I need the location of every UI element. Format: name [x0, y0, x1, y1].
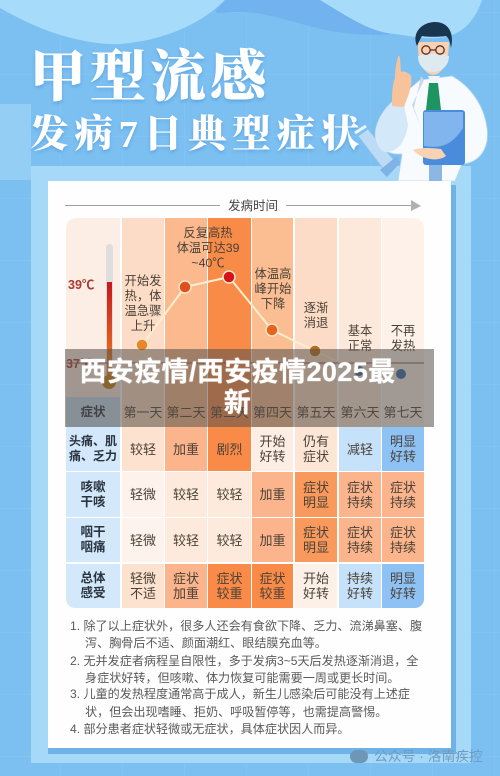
- table row: cough: 加重: [259, 487, 286, 502]
- icon: syringe: [355, 126, 400, 177]
- table row: overall feeling: 症状: [216, 571, 242, 586]
- table row: overall feeling: 开始: [303, 571, 329, 586]
- chart labels: day 4: [254, 267, 291, 311]
- table header row: 第三天: [210, 404, 249, 420]
- table row: sore throat: [66, 518, 424, 562]
- chart labels: day 6: [348, 324, 372, 353]
- chart labels: day 1: 温急骤: [125, 304, 161, 318]
- chart: temperature line with day points: [66, 270, 424, 379]
- chart labels: day 2-3: [177, 226, 239, 270]
- table row: cough: 持续: [347, 494, 373, 510]
- overlay banner: headline: 新: [224, 388, 251, 418]
- chart labels: day 1: 上升: [131, 319, 155, 333]
- table row: overall feeling: 较重: [216, 586, 242, 601]
- table row: headache and fatigue: 较轻: [130, 442, 156, 456]
- text block: notes: [70, 619, 422, 736]
- table row: overall feeling: 轻微: [130, 571, 156, 586]
- chart labels: day 6: 正常: [348, 339, 372, 353]
- chart labels: day 2-3: ~40℃: [191, 256, 225, 270]
- table row: cough: 持续: [390, 494, 416, 510]
- table row: headache and fatigue: 仍有: [303, 434, 329, 449]
- table row: overall feeling: 持续: [347, 571, 373, 586]
- table row: sore throat: 症状: [390, 525, 416, 540]
- table row: headache and fatigue: 好转: [390, 449, 416, 464]
- table row: headache and fatigue: 明显: [390, 434, 416, 449]
- table header row: 症状: [80, 404, 106, 418]
- text block: notes: 3. 儿童的发热程度通常高于成人，新生儿感染后可能没有上述症: [70, 687, 410, 701]
- table row: cough: 轻微: [130, 487, 156, 502]
- chart labels: day 7: 发热: [391, 339, 415, 353]
- table row: headache and fatigue: 症状: [303, 449, 329, 464]
- table row: headache and fatigue: 减轻: [347, 442, 373, 456]
- table row: cough: [66, 472, 424, 517]
- chart labels: day 1: [125, 274, 161, 333]
- chart labels: day 5: 逐渐: [304, 301, 328, 315]
- table row: sore throat: 持续: [347, 540, 373, 555]
- table row: overall feeling: 好转: [390, 586, 416, 601]
- text block: notes: 身症状好转，但咳嗽、体力恢复可能需要一周或更长时间。: [85, 671, 399, 685]
- table row: headache and fatigue: 剧烈: [216, 442, 242, 456]
- chart labels: day 5: 消退: [304, 316, 328, 330]
- panel: main white card: [48, 181, 451, 748]
- text block: notes: 泻、胸骨后不适、颜面潮红、眼结膜充血等。: [85, 636, 327, 650]
- table row: sore throat: 轻微: [130, 532, 156, 548]
- doctor coat: [375, 56, 487, 181]
- table row: cough: 症状: [390, 480, 416, 494]
- chart labels: day 7: 不再: [391, 324, 415, 338]
- table header row: 第二天: [166, 404, 206, 420]
- text block: notes: 2. 无并发症者病程呈自限性，多于发病3~5天后发热逐渐消退，全: [70, 654, 418, 668]
- table row: overall feeling: 总体: [80, 571, 106, 585]
- table row: headache and fatigue: 好转: [259, 449, 286, 464]
- table row: overall feeling: 较重: [259, 586, 286, 601]
- table row: headache and fatigue: 开始: [259, 434, 286, 449]
- table row: overall feeling: 症状: [259, 571, 286, 586]
- table row: headache and fatigue: 头痛、肌: [69, 434, 117, 448]
- table row: headache and fatigue: 加重: [173, 442, 199, 456]
- table row: overall feeling: 不适: [130, 586, 156, 601]
- chart: thermometer: [66, 244, 116, 389]
- table row: headache and fatigue: [66, 427, 424, 471]
- table header row: 第五天: [296, 404, 336, 420]
- chart labels: day 1: 开始发: [125, 274, 161, 288]
- table row: sore throat: 明显: [303, 540, 329, 555]
- table row: sore throat: 症状: [347, 525, 373, 540]
- table row: sore throat: 持续: [390, 540, 416, 555]
- text block: notes: 1. 除了以上症状外，很多人还会有食欲下降、乏力、流涕鼻塞、腹: [70, 619, 422, 633]
- table row: overall feeling: 症状: [173, 571, 199, 586]
- table row: sore throat: 咽痛: [80, 540, 106, 554]
- chart labels: day 2-3: 体温可达39: [177, 241, 239, 255]
- table header row: 第七天: [383, 404, 422, 420]
- overlay banner: headline: 西安疫情/西安疫情2025最: [79, 357, 396, 387]
- table header row: 第一天: [123, 404, 162, 420]
- clipboard: [413, 110, 465, 165]
- table row: cough: 较轻: [216, 487, 242, 502]
- title: influenza A: 甲型流感: [30, 47, 270, 109]
- table row: sore throat: 咽干: [80, 525, 106, 539]
- table row: overall feeling: 好转: [303, 586, 329, 601]
- chart labels: day 4: 体温高: [255, 267, 291, 281]
- table row: cough: 咳嗽: [80, 480, 106, 494]
- table row: headache and fatigue: 痛、乏力: [69, 449, 117, 463]
- chart labels: day 4: 峰开始: [255, 282, 291, 296]
- table row: cough: 明显: [303, 494, 329, 510]
- table row: overall feeling: 加重: [173, 586, 199, 601]
- subtitle: seven-day typical symptoms: 发病7日典型症状: [30, 114, 365, 156]
- table row: sore throat: 较轻: [173, 532, 199, 548]
- chart: timeline heading: [65, 198, 421, 213]
- overlay banner: headline: [65, 349, 434, 427]
- table row: cough: 干咳: [80, 494, 106, 508]
- icon: doctor illustration: [354, 22, 488, 182]
- chart labels: day 2-3: 反复高热: [183, 226, 233, 240]
- chart labels: day 6: 基本: [348, 324, 372, 338]
- table row: overall feeling: 明显: [390, 571, 416, 586]
- head: [415, 22, 452, 75]
- table row: overall feeling: 好转: [347, 586, 373, 601]
- chart labels: day 4: 下降: [261, 297, 285, 311]
- chart labels: day 1: 热，体: [125, 289, 161, 303]
- table row: cough: 症状: [347, 480, 373, 494]
- table row: sore throat: 较轻: [216, 532, 242, 548]
- chart: timeline heading: 发病时间: [228, 198, 278, 213]
- text block: notes: 状，但会出现嗜睡、拒奶、呼吸暂停等，也需提高警惕。: [85, 705, 387, 719]
- table header row: 第六天: [340, 404, 380, 420]
- chart: fever background columns: [66, 218, 424, 427]
- table row: cough: 症状: [303, 480, 329, 494]
- chart labels: day 7: [391, 324, 415, 353]
- chart labels: day 5: [304, 301, 328, 330]
- table row: overall feeling: [66, 564, 424, 608]
- chart: thermometer: 37℃: [66, 357, 93, 371]
- table row: overall feeling: 感受: [80, 586, 106, 600]
- table header row: [66, 397, 422, 427]
- text block: notes: 4. 部分患者症状轻微或无症状，具体症状因人而异。: [70, 722, 350, 736]
- table row: sore throat: 症状: [303, 525, 329, 540]
- table header row: 第四天: [253, 404, 292, 420]
- chart: thermometer: 39℃: [68, 278, 95, 292]
- table row: cough: 较轻: [173, 487, 199, 502]
- watermark: 公众号 · 洛南疾控: [374, 749, 483, 764]
- table row: sore throat: 加重: [259, 532, 286, 548]
